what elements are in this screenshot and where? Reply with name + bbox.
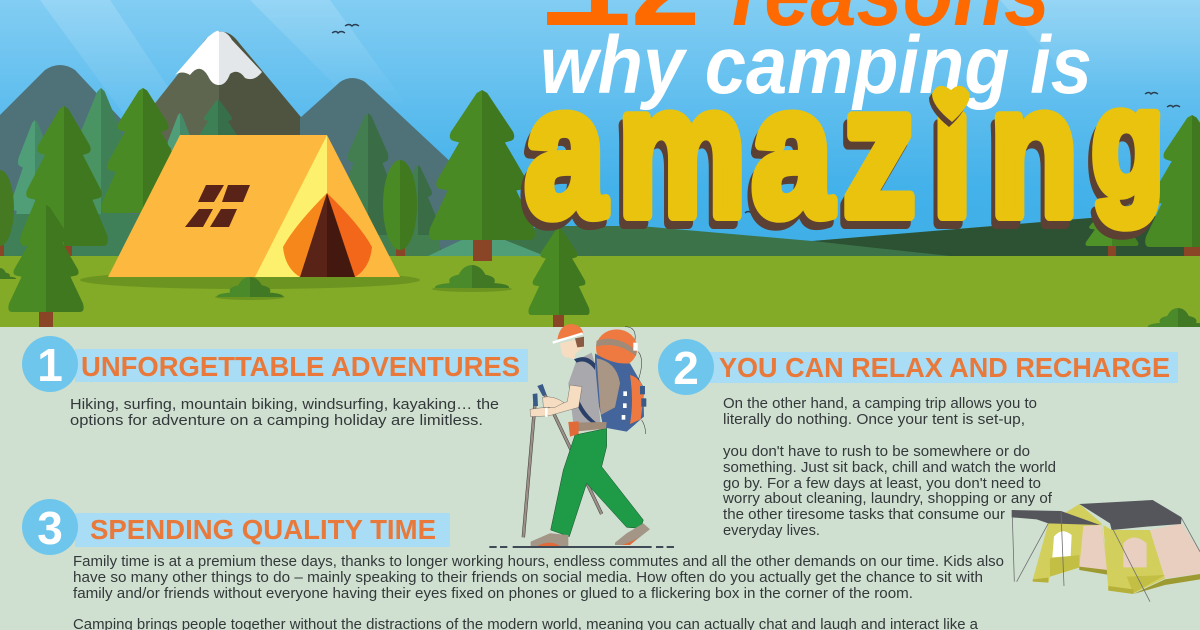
section 1 number badge: [22, 336, 78, 392]
tent window: [185, 185, 250, 227]
section 2 number badge: [658, 339, 714, 395]
section 2 body: [722, 396, 1056, 539]
title line: amazing: g: [1088, 66, 1159, 234]
tree 2: [8, 205, 84, 327]
tree far left oval: [0, 170, 14, 256]
icon: family cabin tent: [1012, 500, 1200, 602]
section 3 heading bar: [75, 513, 450, 547]
birds left: [332, 24, 359, 33]
torso and arms: [530, 353, 604, 427]
section 2 body: something. Just sit back, chill and watch the world: [723, 460, 1056, 476]
title line: amazing: [520, 107, 1160, 240]
pants: [551, 428, 643, 537]
right tent section: [1103, 523, 1200, 594]
title: [521, 0, 1163, 263]
backpack: [595, 327, 646, 434]
section 1 number badge: 1: [37, 339, 63, 391]
section 3 number badge: [22, 499, 78, 555]
panel: scenic header background: [0, 0, 1200, 327]
section 2 body: go by. For a few days at least, you don't need to: [723, 476, 1041, 492]
section 2 body: everyday lives.: [723, 523, 820, 539]
head: [553, 324, 584, 359]
title line: why camping is: why camping is: [540, 20, 1092, 111]
bush by tent: [217, 277, 283, 297]
section 2 body: the other tiresome tasks that consume our: [723, 507, 1005, 523]
distant hills: [428, 215, 1200, 256]
section 3 body: have so many other things to do – mainly speaking to their friends on social media. How often do you actually get the chance to sit with: [73, 570, 983, 586]
section 2 body: worry about cleaning, laundry, shopping or any of: [722, 491, 1053, 507]
section 1 heading bar: [75, 349, 528, 382]
tent door flaps: [283, 193, 372, 277]
section 2 number badge: 2: [673, 342, 699, 394]
panel: content background: [0, 327, 1200, 630]
tree oval by tent: [383, 160, 417, 256]
camping tent: [108, 135, 400, 277]
ground: [0, 256, 1200, 327]
sun rays: [40, 0, 1200, 150]
guy lines: [1012, 512, 1200, 602]
section 3 body: [73, 554, 1004, 630]
left tent section: [1033, 504, 1108, 583]
section 2 heading bar: [710, 352, 1178, 383]
trekking poles: [523, 384, 602, 537]
icon: hiker with backpack: [489, 324, 674, 547]
mountain left: [0, 65, 150, 256]
section 2: [658, 339, 1178, 539]
rear forest right: [334, 113, 441, 256]
section 1 body: [70, 397, 499, 429]
sky: [0, 0, 1200, 258]
mountain right: [300, 78, 470, 256]
tree 3: [101, 88, 185, 213]
tree far right: [1145, 115, 1200, 256]
section 1 body: options for adventure on a camping holiday are limitless.: [70, 413, 483, 429]
ground line: [489, 544, 674, 550]
section 3 number badge: 3: [37, 502, 63, 554]
tree 5: [528, 228, 590, 327]
section 1: [22, 336, 528, 429]
tree 1: [20, 106, 108, 256]
bush shadow and bushes: [0, 265, 1200, 327]
section 2 body: On the other hand, a camping trip allows you to: [723, 396, 1037, 412]
mountain centre: [130, 31, 320, 200]
tent roofs: [1012, 500, 1182, 530]
section 2 heading: YOU CAN RELAX AND RECHARGE: [719, 352, 1170, 383]
section 1 heading: UNFORGETTABLE ADVENTURES: [81, 351, 520, 382]
title line: amazing: amazin: [521, 57, 1074, 263]
section 3 body: family and/or friends without everyone having their eyes fixed on phones or glued to a flickering box in the corner of the room.: [73, 586, 913, 602]
title line: amazing: g: [1092, 58, 1163, 226]
section 2 body: literally do nothing. Once your tent is set-up,: [723, 412, 1025, 428]
section 3 body: Family time is at a premium these days, thanks to longer working hours, endless commutes and all the other demands on our time. Kids also: [73, 554, 1004, 570]
section 2 body: you don't have to rush to be somewhere or do: [723, 444, 1030, 460]
belt: [568, 421, 607, 437]
tree right small: [1086, 196, 1138, 256]
birds right: [745, 92, 1180, 213]
small far mountain right: [1085, 185, 1150, 225]
boots: [531, 523, 650, 546]
title line: 12 reasons: [547, 0, 1050, 49]
section 3 heading: SPENDING QUALITY TIME: [90, 514, 436, 545]
section 1 body: Hiking, surfing, mountain biking, windsurfing, kayaking… the: [70, 397, 499, 413]
rear forest left: [0, 88, 241, 256]
heart on letter i: [929, 86, 970, 127]
section 3: [22, 499, 1004, 630]
tree 4: [429, 90, 535, 261]
title line: amazing: amazin: [525, 49, 1078, 255]
